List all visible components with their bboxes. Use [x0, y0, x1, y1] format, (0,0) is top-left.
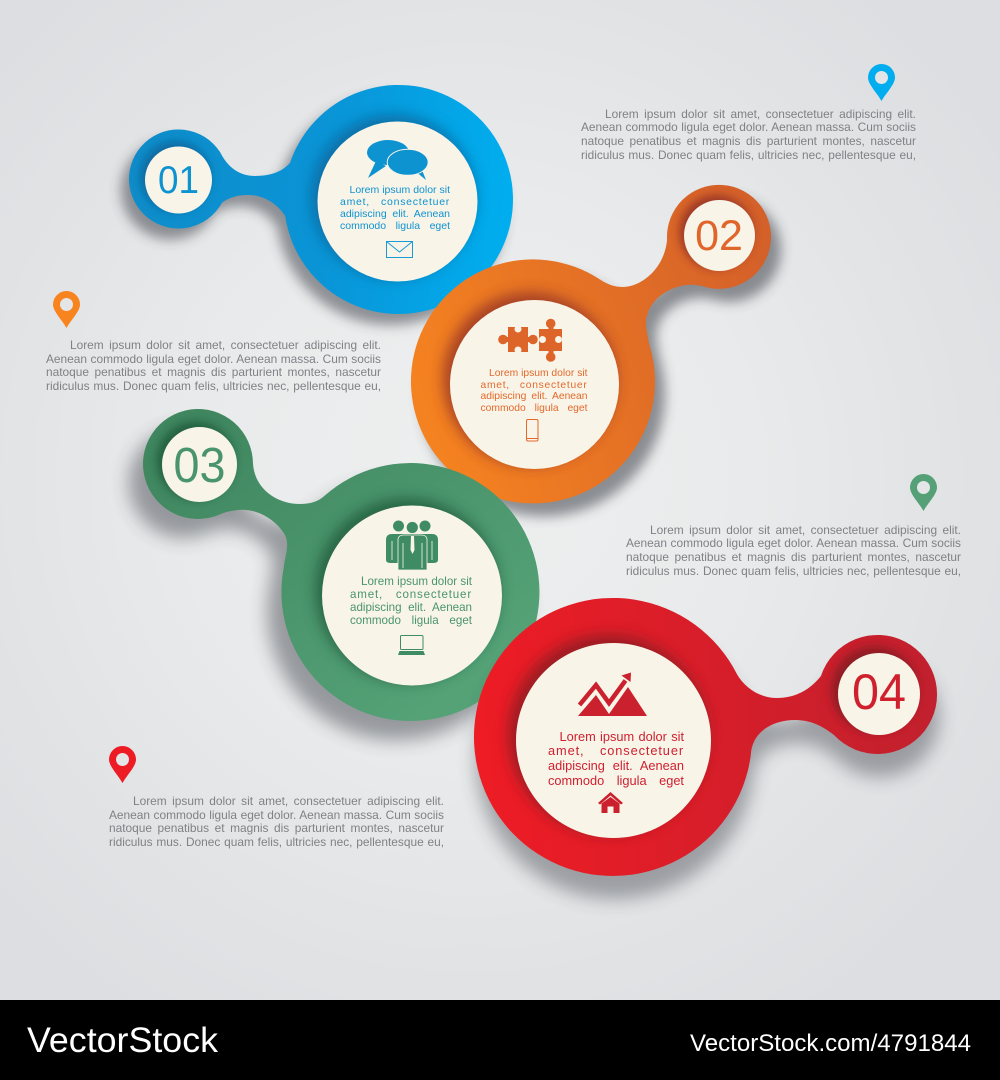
footer: watermark bar — [27, 1021, 971, 1060]
text block: note 1 — [581, 106, 916, 162]
text: step 03 body: adipiscing elit. Aenean — [350, 601, 472, 614]
icon: smartphone — [526, 420, 538, 441]
text: step 02 body: commodo ligula eget — [480, 403, 588, 414]
text block: note 4: Aenean commodo ligula eget dolor. Aenean massa. Cum sociis — [109, 808, 444, 822]
panel: step 02 orange — [410, 184, 788, 524]
icon: house — [598, 792, 623, 813]
text: step 01 body: amet, consectetuer — [340, 196, 450, 208]
text block: note 3: ridiculus mus. Donec quam felis, ultricies nec, pellentesque eu, — [626, 564, 961, 578]
text: step 04 body: Lorem ipsum dolor sit — [560, 728, 684, 744]
panel: step 02 orange: 02 — [695, 212, 743, 260]
text: step 04 body — [548, 728, 684, 788]
icon: red map pin — [109, 746, 136, 783]
text block: note 3: Lorem ipsum dolor sit amet, consectetuer adipiscing elit. — [650, 522, 961, 536]
icon: business people — [386, 520, 438, 570]
panel: step 03 green — [118, 409, 540, 751]
text: step 02 body: amet, consectetuer — [480, 380, 588, 391]
icon: envelope — [386, 242, 412, 258]
text: step 01 body: Lorem ipsum dolor sit — [350, 184, 450, 196]
icon: green map pin — [910, 474, 937, 511]
text: step 04 body: commodo ligula eget — [548, 773, 684, 788]
text: step 04 body: amet, consectetuer — [548, 743, 684, 758]
icon: orange map pin — [53, 291, 80, 328]
icon: chart over mountains — [578, 672, 647, 716]
text: step 02 body — [480, 368, 588, 414]
panel: step 01 blue: 01 — [158, 159, 199, 202]
text: step 04 body: adipiscing elit. Aenean — [548, 758, 684, 773]
icon: laptop — [398, 636, 425, 655]
text block: note 3: natoque penatibus et magnis dis parturient montes, nascetur — [626, 550, 961, 564]
text: step 02 body: Lorem ipsum dolor sit — [489, 368, 588, 379]
panel: step 04 red: 04 — [852, 664, 906, 720]
text block: note 1: Aenean commodo ligula eget dolor. Aenean massa. Cum sociis — [581, 120, 916, 134]
text: step 03 body: amet, consectetuer — [350, 588, 472, 601]
icon: speech bubbles — [367, 140, 428, 180]
text: step 01 body — [340, 184, 450, 232]
text block: note 4 — [109, 794, 444, 849]
text block: note 1: natoque penatibus et magnis dis parturient montes, nascetur — [581, 134, 916, 148]
text: step 03 body — [350, 574, 472, 627]
text block: note 2: Aenean commodo ligula eget dolor. Aenean massa. Cum sociis — [46, 352, 381, 366]
text block: note 4: ridiculus mus. Donec quam felis, ultricies nec, pellentesque eu, — [109, 835, 444, 849]
text block: note 2: natoque penatibus et magnis dis parturient montes, nascetur — [46, 365, 381, 379]
text: step 03 body: commodo ligula eget — [350, 614, 472, 627]
panel: step 03 green: 03 — [174, 439, 226, 493]
text: step 03 body: Lorem ipsum dolor sit — [361, 574, 472, 588]
panel: step 04 red — [466, 598, 949, 909]
text: step 01 body: adipiscing elit. Aenean — [340, 208, 450, 220]
text block: note 2: Lorem ipsum dolor sit amet, consectetuer adipiscing elit. — [70, 338, 381, 352]
text block: note 2: ridiculus mus. Donec quam felis, ultricies nec, pellentesque eu, — [46, 379, 381, 393]
text: step 01 body: commodo ligula eget — [340, 220, 450, 232]
icon: puzzle pieces — [498, 319, 562, 362]
text block: note 1: Lorem ipsum dolor sit amet, consectetuer adipiscing elit. — [605, 106, 916, 120]
text block: note 3 — [626, 522, 961, 578]
text block: note 2 — [46, 338, 381, 393]
text block: note 3: Aenean commodo ligula eget dolor. Aenean massa. Cum sociis — [626, 536, 961, 550]
text block: note 1: ridiculus mus. Donec quam felis, ultricies nec, pellentesque eu, — [581, 148, 916, 162]
text block: note 4: Lorem ipsum dolor sit amet, consectetuer adipiscing elit. — [133, 794, 444, 808]
text block: note 4: natoque penatibus et magnis dis parturient montes, nascetur — [109, 821, 444, 835]
icon: blue map pin — [868, 64, 895, 101]
footer: watermark bar: VectorStock — [27, 1021, 219, 1060]
text: step 02 body: adipiscing elit. Aenean — [480, 391, 588, 402]
panel: step 01 blue — [114, 85, 513, 332]
footer: watermark bar: VectorStock.com/4791844 — [690, 1030, 971, 1057]
